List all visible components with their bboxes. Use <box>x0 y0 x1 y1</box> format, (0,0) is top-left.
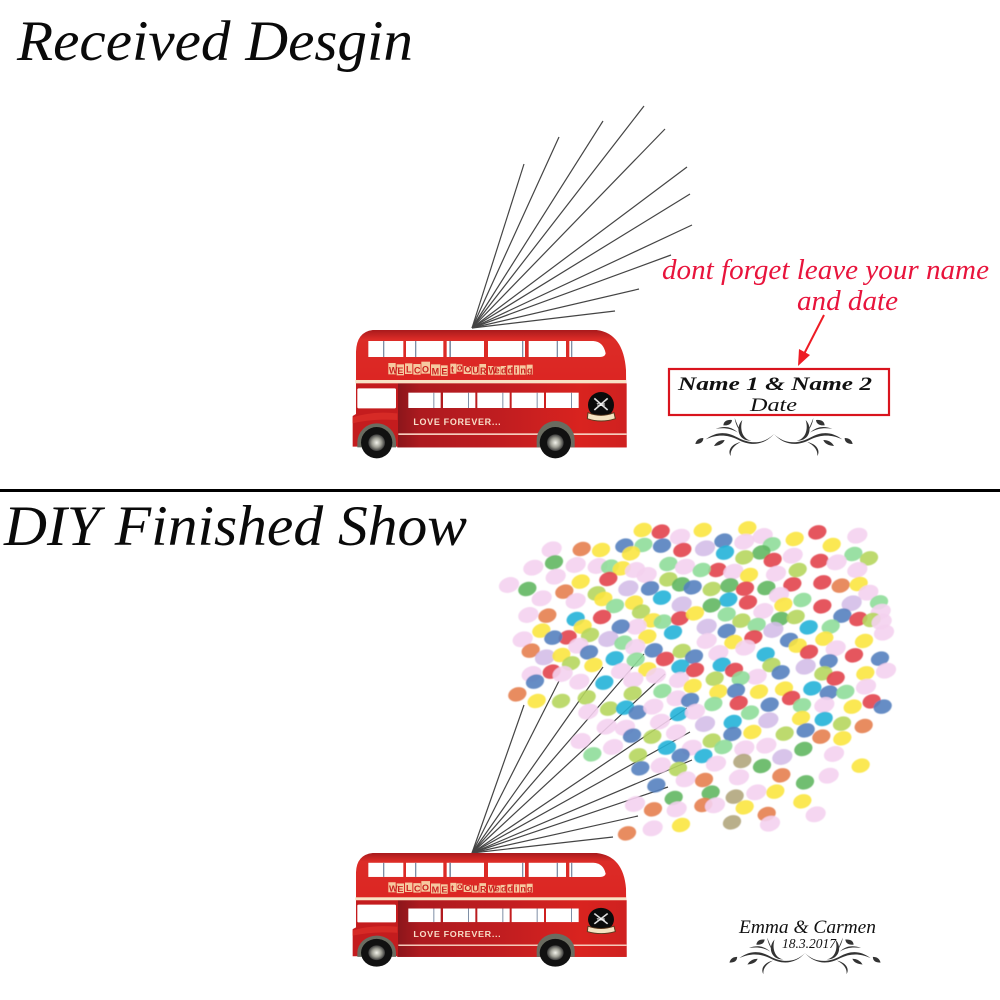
reminder note: dont forget leave your name <box>662 255 989 286</box>
heading: received design: Received Desgin <box>16 10 413 73</box>
bus: top design: T&E <box>597 402 605 407</box>
bus: finished: LOVE FOREVER... <box>413 930 501 939</box>
balloon strings: finished <box>472 654 692 853</box>
name box <box>669 369 889 416</box>
bus: finished: T&E <box>597 917 606 921</box>
bus: top design: LOVE FOREVER... <box>413 417 501 427</box>
flourish: top <box>695 418 853 456</box>
reminder note second line: and date <box>797 286 898 317</box>
bus: top design <box>353 330 627 458</box>
flourish: finished <box>729 938 881 974</box>
wedding date: 18.3.2017 <box>782 936 837 951</box>
bus: finished: WELCOMEtoOURWedding <box>389 882 532 894</box>
divider <box>0 489 1000 492</box>
fingerprint balloons <box>497 519 898 843</box>
name box: Name 1 & Name 2 <box>677 374 873 395</box>
name box: Date <box>749 395 797 416</box>
bus: finished <box>353 853 627 967</box>
couple names: Emma & Carmen <box>738 917 876 938</box>
bus: top design: WELCOMEtoOURWedding <box>389 363 532 377</box>
arrow: to name box <box>798 315 824 366</box>
heading: finished show: DIY Finished Show <box>3 495 467 558</box>
balloon strings: top design <box>472 106 692 328</box>
